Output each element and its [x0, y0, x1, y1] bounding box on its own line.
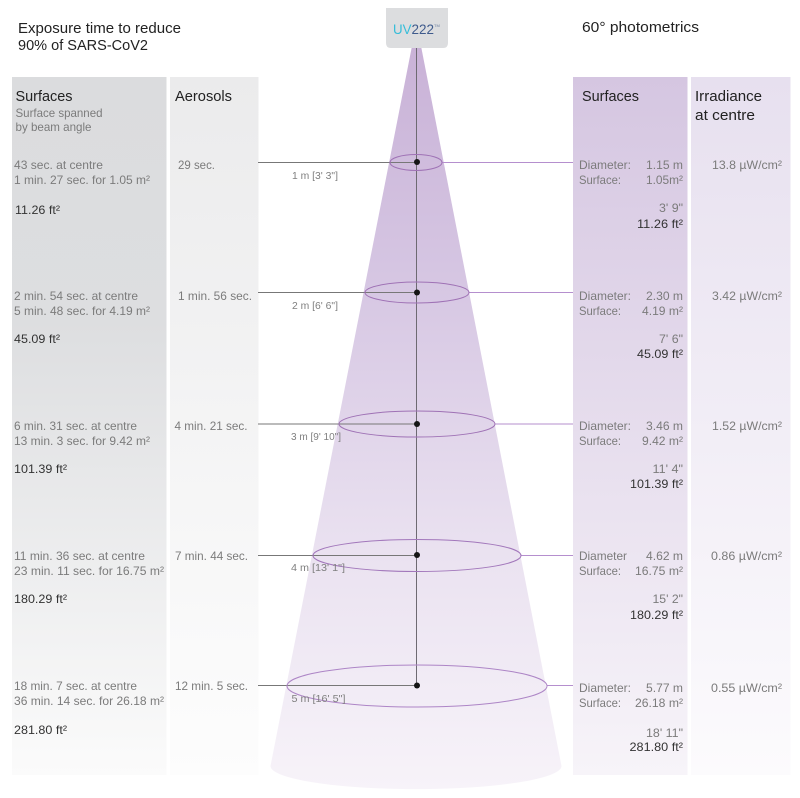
row: 1 m photometrics: Surface:	[579, 173, 621, 187]
irradiance values: 1.52 µW/cm²	[712, 419, 782, 433]
row: 2 m surfaces: 5 min. 48 sec. for 4.19 m²	[14, 304, 150, 318]
row: 1 m surfaces: 11.26 ft²	[15, 203, 60, 217]
row: 2 m surfaces	[14, 289, 150, 346]
subheading: surface spanned: Surface spanned	[16, 106, 102, 120]
row: 2 m surfaces: 45.09 ft²	[14, 332, 60, 346]
heading: irradiance at centre: at centre	[695, 108, 755, 124]
marker: 5 m	[258, 665, 573, 707]
heading: surfaces: Surfaces	[16, 89, 72, 105]
row: 3 m photometrics: Diameter:	[579, 419, 631, 433]
title: exposure time: 90% of SARS-CoV2	[18, 38, 148, 54]
row: 2 m photometrics: Surface:	[579, 304, 621, 318]
marker: 4 m	[258, 540, 573, 574]
irradiance values: 3.42 µW/cm²	[712, 289, 782, 303]
row: 4 m surfaces: 11 min. 36 sec. at centre	[14, 549, 145, 563]
row: 4 m photometrics: Surface:	[579, 564, 621, 578]
row: 3 m photometrics: 9.42 m²	[642, 434, 683, 448]
title: exposure time	[18, 21, 181, 54]
irradiance values: 13.8 µW/cm²	[712, 158, 782, 172]
aerosol times: 1 min. 56 sec.	[178, 289, 252, 303]
subheading: surface spanned	[16, 106, 102, 134]
row: 3 m photometrics: 3.46 m	[646, 419, 683, 433]
row: 5 m photometrics: 281.80 ft²	[630, 740, 683, 754]
beam cone	[270, 46, 562, 789]
irradiance values	[711, 158, 782, 695]
row: 1 m photometrics: 1.15 m	[646, 158, 683, 172]
row: 2 m photometrics: Diameter:	[579, 289, 631, 303]
row: 4 m photometrics: 16.75 m²	[635, 564, 683, 578]
row: 4 m surfaces	[14, 549, 164, 606]
row: 1 m surfaces: 1 min. 27 sec. for 1.05 m²	[14, 173, 150, 187]
row: 3 m surfaces	[14, 419, 150, 476]
logo box: UV222: 222	[412, 22, 434, 37]
row: 5 m surfaces: 281.80 ft²	[14, 723, 67, 737]
panel: irradiance	[691, 77, 790, 775]
marker: 3 m	[258, 411, 573, 443]
row: 2 m surfaces: 2 min. 54 sec. at centre	[14, 289, 138, 303]
row: 3 m surfaces: 101.39 ft²	[14, 462, 67, 476]
marker: 3 m: 3 m [9' 10"]	[291, 431, 341, 443]
row: 3 m photometrics: Surface:	[579, 434, 621, 448]
marker: 2 m: 2 m [6' 6"]	[292, 300, 338, 312]
row: 5 m photometrics: Surface:	[579, 696, 621, 710]
row: 1 m photometrics	[579, 158, 683, 231]
panel: aerosols	[170, 77, 258, 775]
logo box: UV222: UV	[393, 22, 412, 37]
marker: 4 m: 4 m [13' 1"]	[291, 562, 345, 574]
irradiance values: 0.86 µW/cm²	[711, 549, 782, 563]
title: 60 degree photometrics: 60° photometrics	[582, 20, 699, 36]
row: 5 m surfaces	[14, 679, 164, 737]
heading: irradiance at centre	[695, 89, 762, 124]
heading: surfaces: Surfaces	[582, 89, 639, 105]
row: 2 m photometrics	[579, 289, 683, 361]
row: 1 m surfaces	[14, 158, 150, 217]
title: exposure time: Exposure time to reduce	[18, 21, 181, 37]
row: 4 m photometrics	[579, 549, 683, 622]
row: 3 m surfaces: 6 min. 31 sec. at centre	[14, 419, 137, 433]
row: 4 m photometrics: 180.29 ft²	[630, 608, 683, 622]
row: 5 m photometrics: 5.77 m	[646, 681, 683, 695]
row: 5 m photometrics: 18' 11"	[646, 726, 683, 740]
row: 2 m photometrics: 45.09 ft²	[637, 347, 683, 361]
row: 1 m photometrics: 1.05m²	[646, 173, 683, 187]
row: 2 m photometrics: 2.30 m	[646, 289, 683, 303]
heading: aerosols: Aerosols	[175, 89, 232, 105]
row: 3 m photometrics: 11' 4"	[652, 462, 683, 476]
row: 5 m photometrics: 26.18 m²	[635, 696, 683, 710]
aerosol times	[174, 158, 252, 693]
marker: 1 m	[258, 154, 573, 182]
logo box: UV222	[386, 8, 448, 48]
row: 1 m photometrics: 11.26 ft²	[637, 217, 683, 231]
row: 4 m photometrics: 15' 2"	[652, 592, 683, 606]
marker: 1 m: 1 m [3' 3"]	[292, 170, 338, 182]
panel: surfaces photometrics	[573, 77, 688, 775]
row: 4 m photometrics: 4.62 m	[646, 549, 683, 563]
panel: surfaces exposure	[12, 77, 166, 775]
row: 5 m photometrics: Diameter:	[579, 681, 631, 695]
row: 2 m photometrics: 4.19 m²	[642, 304, 683, 318]
row: 3 m surfaces: 13 min. 3 sec. for 9.42 m²	[14, 434, 150, 448]
aerosol times: 7 min. 44 sec.	[175, 549, 248, 563]
irradiance values: 0.55 µW/cm²	[711, 681, 782, 695]
aerosol times: 29 sec.	[178, 158, 215, 172]
row: 5 m surfaces: 18 min. 7 sec. at centre	[14, 679, 137, 693]
row: 1 m photometrics: Diameter:	[579, 158, 631, 172]
central axis	[416, 48, 418, 686]
row: 4 m surfaces: 23 min. 11 sec. for 16.75 m²	[14, 564, 164, 578]
marker: 5 m: 5 m [16' 5"]	[292, 693, 346, 705]
row: 3 m photometrics: 101.39 ft²	[630, 477, 683, 491]
subheading: surface spanned: by beam angle	[16, 120, 92, 134]
row: 4 m surfaces: 180.29 ft²	[14, 592, 67, 606]
aerosol times: 12 min. 5 sec.	[175, 679, 248, 693]
row: 3 m photometrics	[579, 419, 683, 491]
row: 5 m photometrics	[579, 681, 683, 754]
row: 1 m surfaces: 43 sec. at centre	[14, 158, 103, 172]
logo box: UV222: TM	[434, 23, 440, 28]
row: 5 m surfaces: 36 min. 14 sec. for 26.18 m²	[14, 694, 164, 708]
aerosol times: 4 min. 21 sec.	[174, 419, 248, 433]
row: 2 m photometrics: 7' 6"	[659, 332, 683, 346]
row: 1 m photometrics: 3' 9"	[659, 201, 683, 215]
heading: irradiance at centre: Irradiance	[695, 89, 762, 105]
marker: 2 m	[258, 282, 573, 312]
row: 4 m photometrics: Diameter	[579, 549, 627, 563]
